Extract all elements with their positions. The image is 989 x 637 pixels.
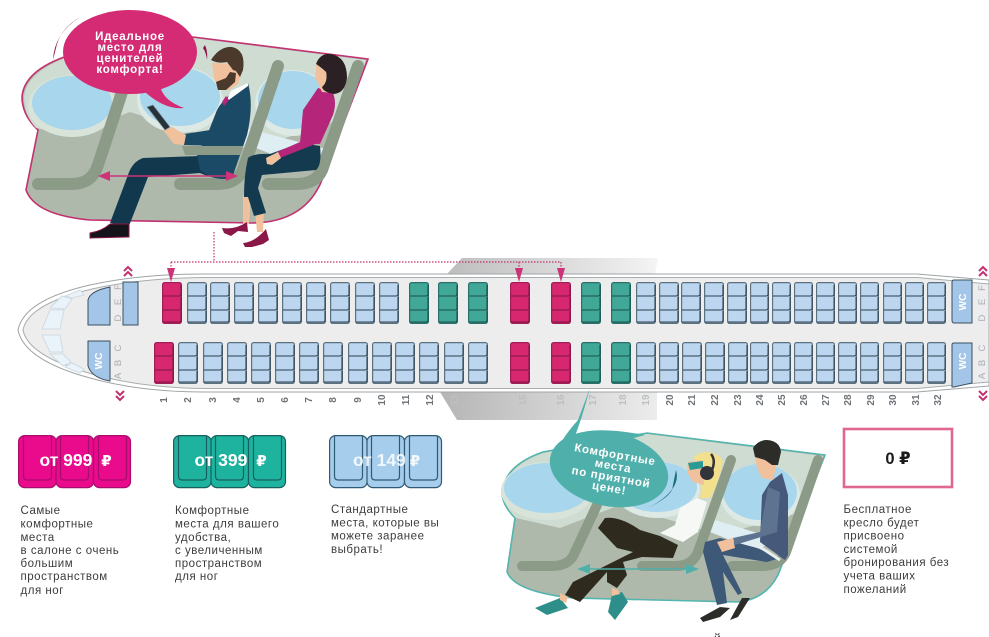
WC labels: WC (94, 353, 105, 369)
seats (38, 66, 358, 184)
speech bubble with tail: цене! (591, 480, 627, 498)
row numbers: 25 (777, 394, 788, 406)
dotted connector with seat arrows (167, 232, 565, 282)
row letters: C (977, 344, 988, 351)
text: magenta seats description: Самые (20, 505, 60, 517)
text: free seat description: Бесплатное (844, 504, 912, 516)
speech bubble: место для (98, 42, 162, 54)
text: blue seats description: Стандартные (331, 504, 408, 516)
row numbers: 6 (280, 397, 291, 403)
text: blue seats description: можете заранее (331, 530, 424, 542)
illustration: woman and man in comfort seats (501, 388, 825, 622)
price card: green seats (174, 436, 286, 488)
speech bubble with tail: по приятной (571, 465, 651, 491)
text: free seat description: учета ваших (844, 570, 915, 582)
row numbers (159, 394, 944, 406)
speech bubble with tail: места (594, 457, 632, 476)
cabin background (502, 433, 825, 602)
row letters: B (113, 360, 124, 366)
row numbers: 21 (687, 394, 698, 406)
grey band behind fuselage, bottom (440, 392, 657, 420)
row numbers: 24 (755, 394, 766, 406)
seats: upper block D E F (163, 283, 945, 323)
row letters: A (977, 372, 988, 379)
text: free seat description: бронирования без (844, 557, 949, 569)
row letters: D (977, 314, 988, 321)
row numbers: 32 (933, 394, 944, 406)
row numbers: 1 (159, 397, 170, 403)
legroom arrow (577, 564, 699, 574)
price card: magenta seats (19, 436, 131, 488)
text: magenta seats description: для ног (20, 585, 64, 597)
cockpit windows (42, 290, 84, 373)
price card: magenta seats: от 999 ₽ (40, 450, 112, 470)
man in suit (700, 440, 788, 622)
price card: blue seats: от 149 ₽ (353, 450, 420, 470)
row numbers: 19 (641, 394, 652, 406)
speech bubble: Идеальное (95, 31, 165, 43)
row numbers: 12 (425, 394, 436, 406)
row numbers: 14 (475, 394, 486, 406)
text: magenta seats description: в салоне с очень (20, 545, 119, 557)
text: green seats description: пространством (175, 558, 262, 570)
text: green seats description: с увеличенным (175, 545, 263, 557)
row numbers: 7 (304, 397, 315, 403)
illustration: man and woman in roomy seats (22, 10, 368, 247)
windows (28, 67, 331, 165)
speech bubble: ценителей (97, 53, 163, 65)
row letters: E (113, 299, 124, 305)
text: magenta seats description: места (20, 532, 55, 544)
text: magenta seats description: пространством (20, 571, 108, 583)
row numbers: 23 (733, 394, 744, 406)
speech bubble (53, 10, 207, 108)
row letters: D (113, 314, 124, 321)
price card: free seat: 0 ₽ (885, 450, 911, 468)
row numbers: 9 (353, 397, 364, 403)
row numbers: 20 (665, 394, 676, 406)
row numbers: 2 (183, 397, 194, 403)
row numbers: 4 (232, 397, 243, 403)
price card: free seat (844, 429, 952, 487)
row numbers: 10 (377, 394, 388, 406)
row letters: B (977, 360, 988, 366)
text: free seat description: кресло будет (844, 518, 920, 530)
seats: lower block A B C (155, 343, 945, 383)
row numbers: 13 (450, 394, 461, 406)
text: free seat description: системой (844, 544, 898, 556)
galley blocks (88, 280, 972, 387)
price card: blue seats (330, 436, 442, 488)
row numbers: 30 (888, 394, 899, 406)
speech bubble with tail: Комфортные (573, 442, 657, 468)
speech bubble with tail (543, 388, 677, 518)
row numbers: 5 (256, 397, 267, 403)
row letters: A (113, 372, 124, 379)
fuselage (18, 274, 989, 392)
row numbers: 18 (618, 394, 629, 406)
woman with headphones (535, 452, 723, 620)
row numbers: 28 (843, 394, 854, 406)
row numbers: 15 (518, 394, 529, 406)
row letters: F (113, 284, 124, 290)
WC labels (94, 294, 969, 369)
row letters (113, 284, 988, 379)
row numbers: 29 (866, 394, 877, 406)
text: green seats description: Комфортные (175, 505, 249, 517)
speech bubble: комфорта! (96, 64, 164, 76)
text: free seat description: пожеланий (844, 584, 907, 596)
text: magenta seats description: комфортные (20, 518, 93, 530)
row numbers: 3 (208, 397, 219, 403)
row numbers: 27 (821, 394, 832, 406)
seats (522, 460, 818, 566)
cabin wall (503, 434, 823, 535)
text: blue seats description: выбрать! (331, 544, 383, 556)
man (90, 47, 251, 238)
row letters: E (977, 299, 988, 305)
exit chevrons (116, 267, 987, 400)
row numbers: 31 (911, 394, 922, 406)
row numbers: 22 (710, 394, 721, 406)
cabin background (22, 37, 368, 223)
row letters: C (113, 344, 124, 351)
text: magenta seats description: большим (20, 558, 73, 570)
text: blue seats description: места, которые вы (331, 518, 439, 530)
windows (501, 462, 800, 550)
row numbers: 26 (799, 394, 810, 406)
row letters: F (977, 285, 988, 291)
text: green seats description: удобства, (175, 532, 231, 544)
row numbers: 17 (588, 394, 599, 406)
text: free seat description: присвоено (844, 530, 904, 542)
row numbers: 16 (556, 394, 567, 406)
WC labels: WC (958, 294, 969, 310)
row numbers: 8 (328, 397, 339, 403)
text: green seats description: для ног (175, 571, 218, 583)
price card: green seats: от 399 ₽ (194, 450, 267, 470)
legroom arrow (98, 171, 238, 181)
grey band behind fuselage, top (447, 258, 658, 274)
WC labels: WC (958, 353, 969, 369)
row numbers: 11 (401, 394, 412, 405)
woman (222, 54, 347, 247)
text: green seats description: места для вашего (175, 518, 279, 530)
cabin wall (24, 38, 366, 150)
